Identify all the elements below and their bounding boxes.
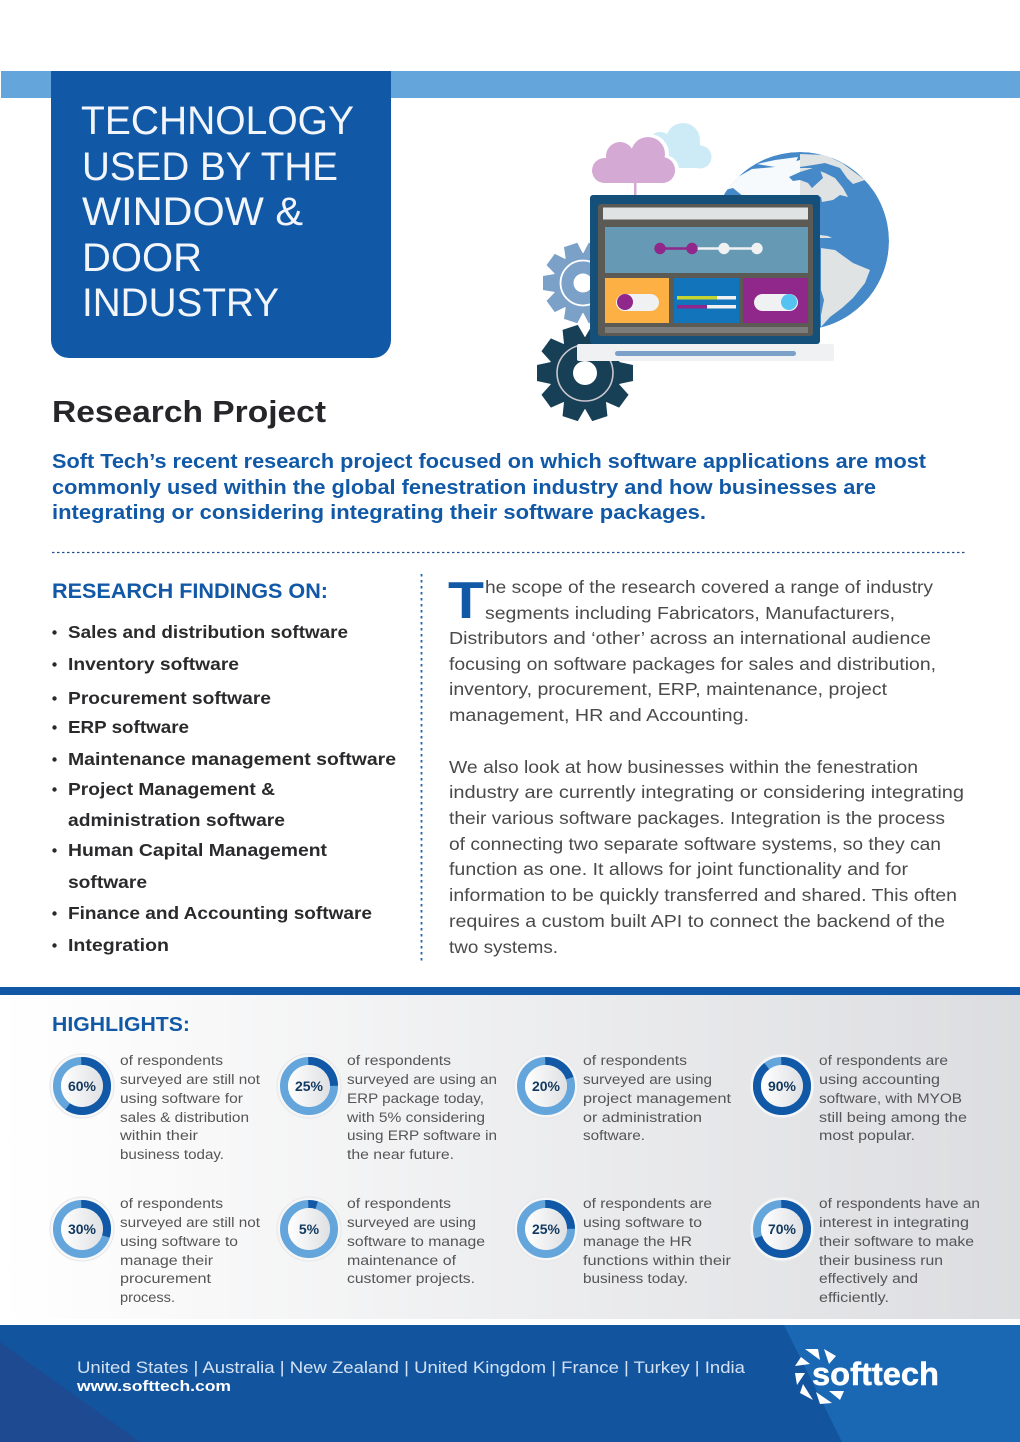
logo: softtech — [795, 1349, 939, 1404]
findings list: Procurement software — [68, 688, 271, 708]
body text: management, HR and Accounting. — [449, 705, 749, 725]
stat: 60%: sales & distribution — [120, 1110, 249, 1126]
stat: 30%: surveyed are still not — [120, 1215, 260, 1231]
stat: 25% ERP: of respondents — [347, 1053, 451, 1069]
stat: 60%: 60% — [68, 1078, 97, 1094]
stat: 70%: efficiently. — [819, 1290, 889, 1306]
stat: 25% ERP: 25% — [295, 1078, 324, 1094]
drop cap: T — [448, 572, 484, 630]
findings list: Integration — [68, 935, 169, 955]
stat: 25% HR: business today. — [583, 1271, 688, 1287]
stat: 25% HR: manage the HR — [583, 1234, 692, 1250]
stat: 70%: their business run — [819, 1253, 943, 1269]
stat: 25% HR — [514, 1196, 731, 1287]
stat: 70%: of respondents have an — [819, 1196, 980, 1212]
heading: research project: Research Project — [52, 394, 326, 429]
stat: 5%: software to manage — [347, 1234, 485, 1250]
stat: 25% ERP: surveyed are using an — [347, 1072, 497, 1088]
stat: 25% ERP: using ERP software in — [347, 1128, 497, 1144]
body text: segments including Fabricators, Manufacturers, — [485, 603, 895, 623]
stat: 20% — [514, 1053, 731, 1144]
stat: 30%: using software to — [120, 1234, 238, 1250]
icon: light gear — [543, 242, 623, 324]
stat: 5%: surveyed are using — [347, 1215, 476, 1231]
stat: 25% ERP: ERP package today, — [347, 1091, 484, 1107]
findings list: Finance and Accounting software — [68, 903, 372, 923]
stat: 25% HR: of respondents are — [583, 1196, 712, 1212]
findings list: Maintenance management software — [68, 749, 396, 769]
icon: dark gear — [537, 324, 633, 422]
stat: 5% — [277, 1196, 485, 1287]
body text: Distributors and ‘other’ across an international audience — [449, 628, 931, 648]
stat: 30%: manage their — [120, 1253, 213, 1269]
intro paragraph: commonly used within the global fenestration industry and how businesses are — [52, 476, 876, 499]
stat: 70%: their software to make — [819, 1234, 974, 1250]
stat: 30%: procurement — [120, 1271, 211, 1287]
footer countries: United States | Australia | New Zealand | United Kingdom | France | Turkey | India — [77, 1358, 746, 1377]
panel: footer — [0, 1325, 1020, 1442]
stat: 60%: within their — [119, 1128, 198, 1144]
stat: 60%: surveyed are still not — [120, 1072, 260, 1088]
title text — [81, 99, 354, 325]
stat: 25% HR: 25% — [532, 1221, 561, 1237]
stat: 30%: 30% — [68, 1221, 97, 1237]
illustration: laptop, globe, clouds and gears — [537, 123, 889, 422]
stat: 90%: software, with MYOB — [819, 1091, 962, 1107]
stat: 60%: of respondents — [120, 1053, 223, 1069]
body text: industry are currently integrating or considering integrating — [449, 782, 964, 802]
findings list: Human Capital Management — [68, 840, 327, 860]
stat: 90% — [750, 1053, 967, 1144]
stat: 60% — [50, 1053, 260, 1163]
stat: 90%: 90% — [768, 1078, 797, 1094]
findings list — [52, 622, 396, 955]
stat: 30%: of respondents — [120, 1196, 223, 1212]
title text: WINDOW & — [82, 190, 303, 234]
stat: 20%: 20% — [532, 1078, 561, 1094]
stat: 90%: using accounting — [819, 1072, 940, 1088]
findings list: administration software — [68, 810, 285, 830]
body text: focusing on software packages for sales and distribution, — [449, 654, 936, 674]
body text: of connecting two separate software systems, so they can — [449, 834, 941, 854]
body text: function as one. It allows for joint functionality and for — [449, 859, 908, 879]
stat: 20%: surveyed are using — [583, 1072, 712, 1088]
stat: 5%: customer projects. — [347, 1271, 475, 1287]
stat: 5%: 5% — [299, 1221, 320, 1237]
stat: 25% ERP — [277, 1053, 497, 1163]
panel: title — [51, 71, 391, 358]
stat: 70%: interest in integrating — [819, 1215, 969, 1231]
top blue band — [1, 71, 1020, 98]
stat: 70%: effectively and — [819, 1271, 918, 1287]
stat: 60%: using software for — [120, 1091, 243, 1107]
body text: information to be quickly transferred and shared. This often — [449, 885, 957, 905]
icon: blue cloud — [647, 123, 712, 168]
body text: requires a custom built API to connect the backend of the — [449, 911, 945, 931]
stat: 60%: business today. — [120, 1147, 224, 1163]
stat: 30%: process. — [120, 1290, 175, 1306]
body text: inventory, procurement, ERP, maintenance, project — [449, 679, 887, 699]
stat: 90%: still being among the — [819, 1110, 967, 1126]
findings list: ERP software — [68, 717, 189, 737]
icon: globe — [711, 152, 889, 330]
body text: their various software packages. Integration is the process — [449, 808, 945, 828]
icon: laptop — [577, 195, 834, 361]
findings list: software — [68, 872, 147, 892]
title text: TECHNOLOGY — [81, 99, 354, 143]
stat: 90%: of respondents are — [819, 1053, 948, 1069]
stat: 70%: 70% — [768, 1221, 797, 1237]
body text: We also look at how businesses within the fenestration — [449, 757, 918, 777]
body text: two systems. — [449, 937, 558, 957]
intro paragraph: Soft Tech’s recent research project focused on which software applications are most — [52, 450, 926, 473]
findings list: Project Management & — [68, 779, 275, 799]
stat: 90%: most popular. — [819, 1128, 915, 1144]
stat: 20%: project management — [583, 1091, 731, 1107]
stat: 20%: or administration — [583, 1110, 702, 1126]
body text: he scope of the research covered a range of industry — [485, 577, 933, 597]
heading: highlights: HIGHLIGHTS: — [52, 1014, 190, 1036]
stat: 30% — [50, 1196, 260, 1306]
findings list: Sales and distribution software — [68, 622, 348, 642]
stat: 20%: of respondents — [583, 1053, 687, 1069]
findings list: Inventory software — [68, 654, 239, 674]
stat: 25% HR: using software to — [583, 1215, 702, 1231]
heading: research findings: RESEARCH FINDINGS ON: — [52, 580, 328, 603]
title text: DOOR — [82, 236, 202, 280]
stat: 25% HR: functions within their — [583, 1253, 731, 1269]
intro paragraph: integrating or considering integrating their software packages. — [52, 501, 706, 524]
icon: pink cloud — [592, 134, 679, 196]
title text: USED BY THE — [82, 145, 338, 189]
stat: 5%: of respondents — [347, 1196, 451, 1212]
stat: 25% ERP: the near future. — [347, 1147, 454, 1163]
logo: softtech: softtech — [812, 1356, 939, 1392]
stat: 5%: maintenance of — [347, 1253, 456, 1269]
title text: INDUSTRY — [82, 281, 279, 325]
body text — [449, 577, 964, 957]
footer website: www.softtech.com — [76, 1378, 231, 1395]
stat: 70% — [750, 1196, 980, 1306]
intro paragraph — [52, 450, 926, 524]
stat: 25% ERP: with 5% considering — [346, 1110, 485, 1126]
stat: 20%: software. — [583, 1128, 645, 1144]
panel: highlights — [0, 987, 1020, 1319]
